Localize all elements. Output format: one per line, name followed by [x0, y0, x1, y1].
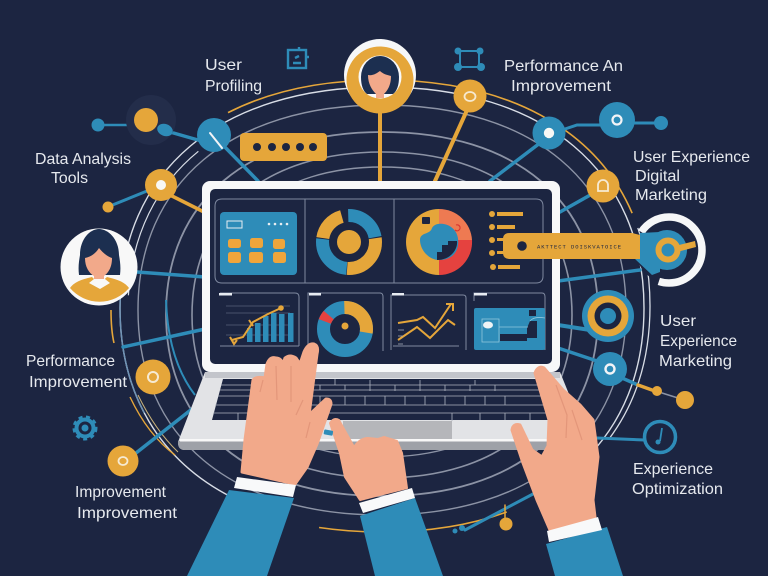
- label: performance improvement: [26, 353, 128, 391]
- icon: gear: [74, 417, 96, 439]
- label: improvement improvement: Improvement: [75, 484, 167, 501]
- icon: clipboard: [288, 47, 309, 68]
- label: performance an improvement: [504, 58, 623, 95]
- label: user experience digital marketing: [633, 149, 750, 204]
- pie legend: [489, 211, 523, 270]
- label: user experience digital marketing: Marketing: [635, 187, 707, 204]
- laptop screen: [202, 181, 560, 372]
- node: target gauge: [634, 217, 702, 283]
- hinge shade: [205, 372, 560, 378]
- image card: [474, 308, 545, 350]
- panel frames: [215, 199, 545, 351]
- node: concentric target: [582, 290, 634, 342]
- label: experience optimization: [632, 461, 723, 498]
- label: performance improvement: Improvement: [29, 374, 128, 391]
- callout tag: AKTTECT DOISKVATOICE: [537, 244, 622, 250]
- bottom pin and dots: [452, 518, 512, 534]
- middle hand: [324, 419, 407, 500]
- callout tag: [503, 233, 640, 259]
- trend line chart: [398, 304, 455, 344]
- node: blue ring lower: [593, 352, 694, 409]
- tab markers: [219, 293, 487, 296]
- right hand: [512, 367, 598, 530]
- label: user experience marketing: Experience: [660, 333, 737, 350]
- label: user experience marketing: Marketing: [659, 353, 732, 370]
- node: gold ring bottom left: [108, 446, 138, 476]
- node: gold ring top: [454, 80, 486, 112]
- node: gold ring left: [136, 360, 170, 394]
- left hand: [242, 344, 331, 484]
- label: user experience marketing: [659, 313, 737, 370]
- label: improvement improvement: Improvement: [77, 505, 178, 522]
- node: blue ring: [599, 102, 668, 138]
- node: halo gold dot: [92, 95, 176, 145]
- middle cuff and sleeve: [359, 488, 443, 576]
- bar and line chart: [226, 305, 294, 344]
- concentric orbit arcs: [111, 80, 650, 532]
- trackpad: [343, 421, 452, 439]
- label: user experience marketing: User: [660, 313, 697, 330]
- label: experience optimization: Experience: [633, 461, 713, 478]
- donut chart top: [322, 216, 376, 268]
- node: blue pin top left: [197, 118, 231, 152]
- label: performance improvement: Performance: [26, 353, 115, 370]
- label: experience optimization: Optimization: [632, 481, 723, 498]
- label: user experience digital marketing: Digital: [635, 168, 680, 185]
- node: blue white dot: [532, 116, 566, 150]
- label: improvement improvement: [75, 484, 178, 522]
- pie chart: [406, 209, 472, 275]
- donut chart bottom: [324, 308, 366, 350]
- avatar: top woman: [344, 39, 416, 114]
- keyboard: [212, 379, 548, 421]
- avatar: left woman: [60, 228, 138, 306]
- label: user profiling: Profiling: [205, 78, 262, 95]
- label: data analysis tools: Data Analysis: [35, 151, 131, 168]
- icon: connected nodes: [454, 48, 485, 71]
- label: user profiling: [205, 57, 262, 95]
- tiles card: [220, 212, 297, 275]
- connector lines: [104, 108, 678, 530]
- laptop base: [178, 372, 588, 450]
- label: user experience digital marketing: User Experience: [633, 149, 750, 166]
- right cuff and sleeve: [546, 517, 623, 576]
- password tag: [240, 133, 327, 161]
- node: clock note: [644, 422, 676, 452]
- label: performance an improvement: Improvement: [511, 78, 612, 95]
- label: user profiling: User: [205, 57, 243, 74]
- label: data analysis tools: Tools: [51, 170, 88, 187]
- node: gold tools: [102, 169, 177, 212]
- label: data analysis tools: [35, 151, 131, 187]
- left cuff and sleeve: [187, 477, 296, 576]
- node: gold lock: [586, 170, 620, 202]
- label: performance an improvement: Performance An: [504, 58, 623, 75]
